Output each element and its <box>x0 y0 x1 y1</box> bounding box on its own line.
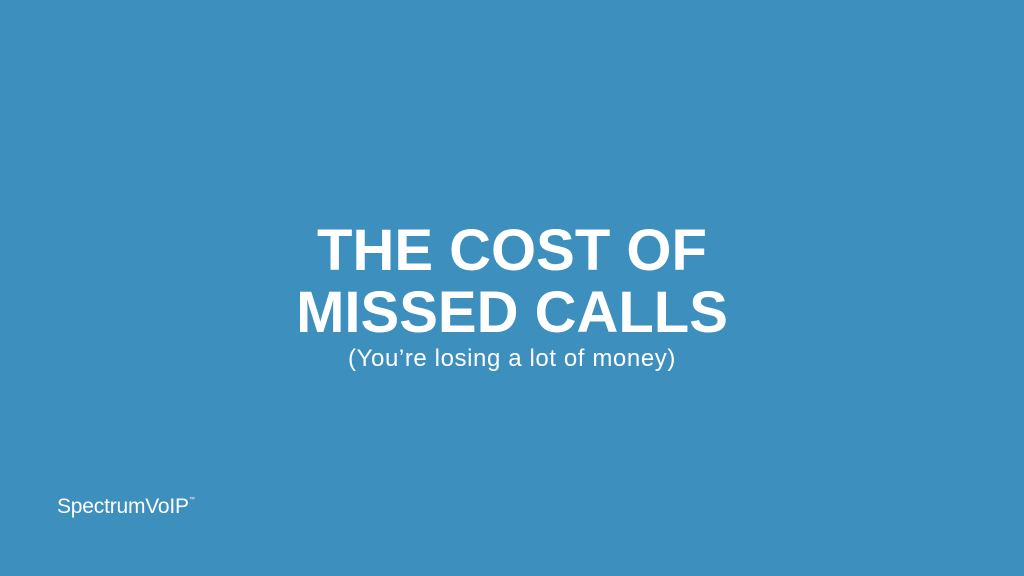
subtitle: (You’re losing a lot of money) <box>348 345 676 372</box>
title: THE COST OF <box>317 218 707 283</box>
title <box>296 218 728 345</box>
title: MISSED CALLS <box>296 280 728 345</box>
logo: SpectrumVoIP: SpectrumVoIP™ <box>57 495 195 518</box>
